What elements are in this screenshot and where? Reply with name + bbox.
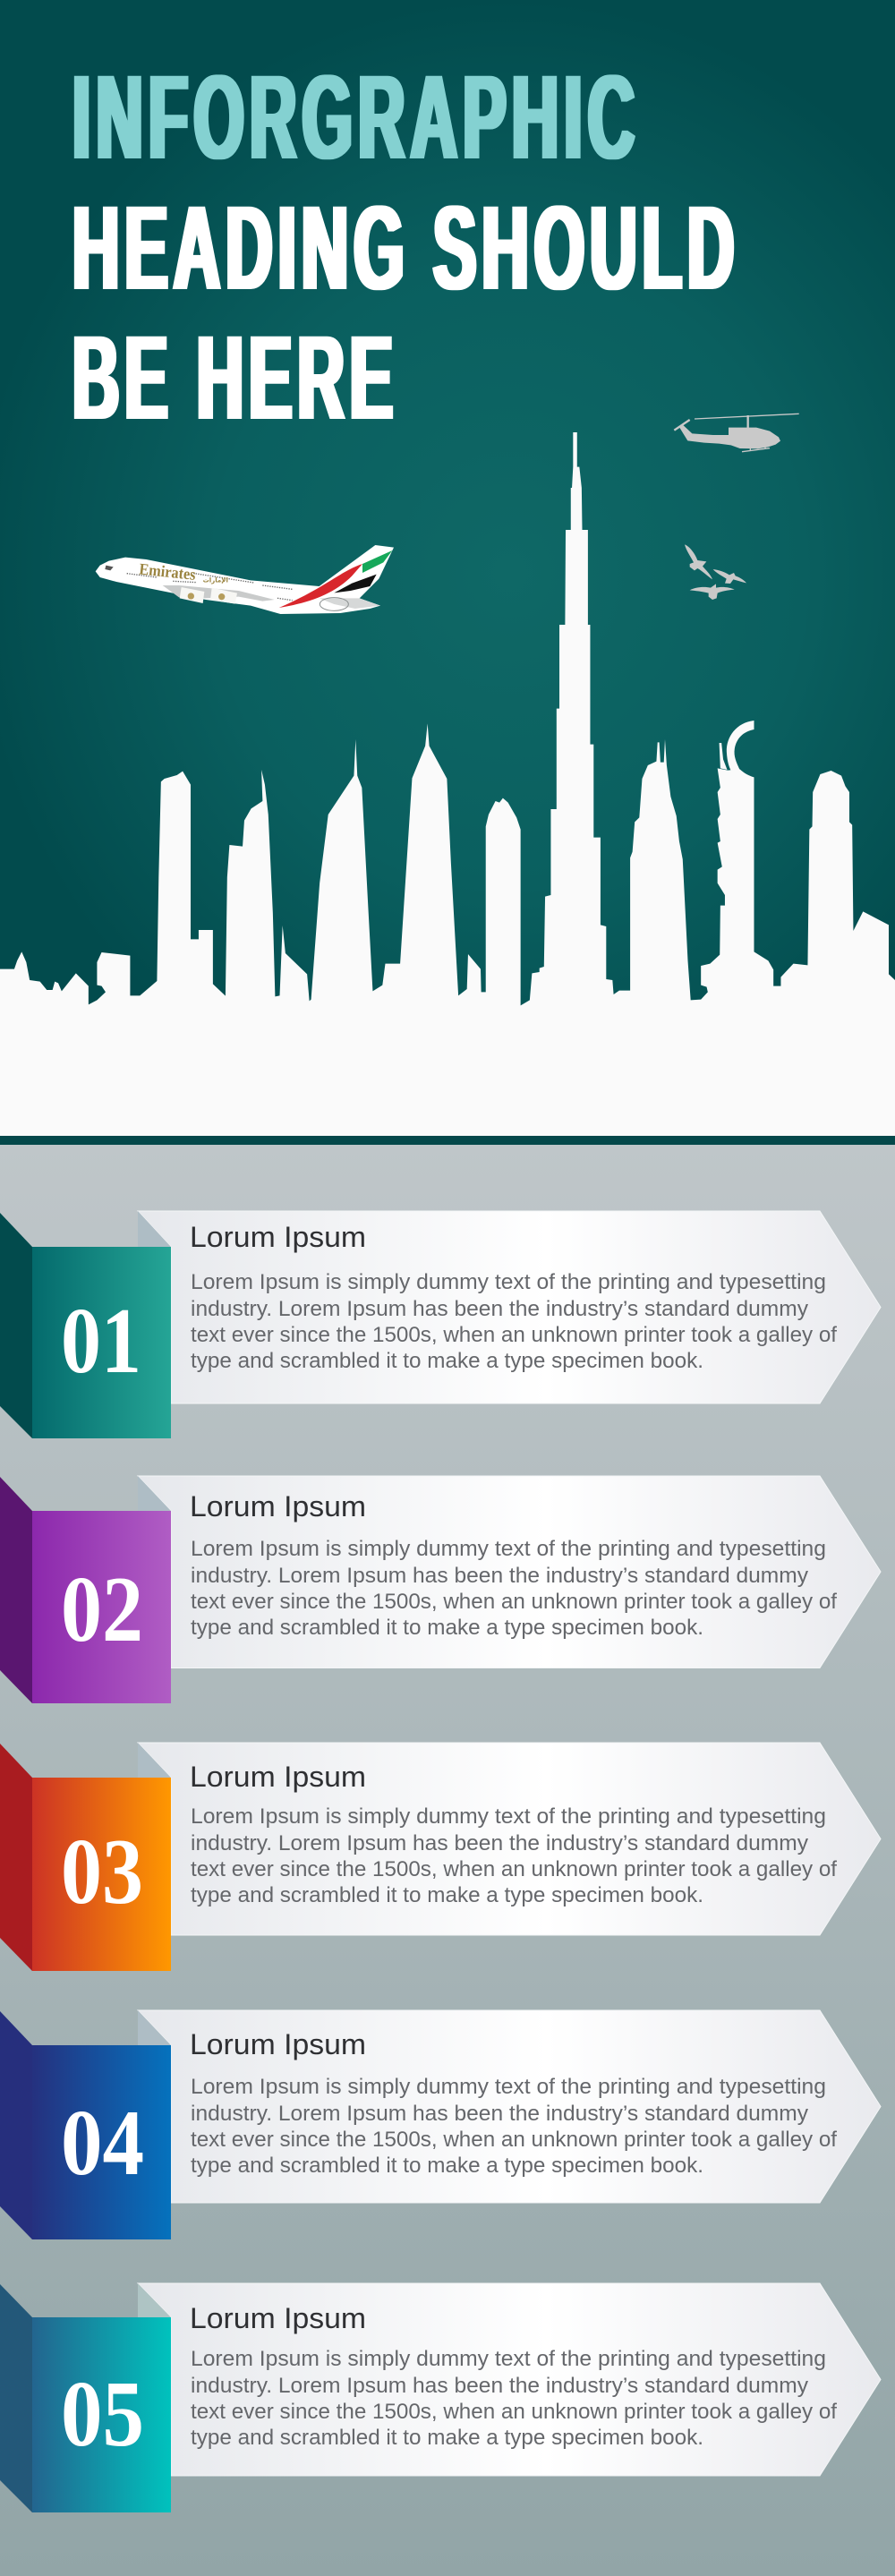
fold [138,1476,171,1511]
bottom band [0,1136,895,1145]
fold [138,1211,171,1247]
airline name arabic: الإمارات [203,576,228,584]
skyline silhouette [0,432,895,1137]
body text [191,2347,837,2450]
number block [32,2045,171,2239]
arrow card [138,2010,881,2203]
body text: text ever since the 1500s, when an unknown printer took a galley of [191,1590,837,1614]
number: 02 [61,1557,143,1661]
arrow card [138,1743,881,1935]
body text: Lorem Ipsum is simply dummy text of the printing and typesetting [191,1270,826,1294]
body text [191,1537,837,1640]
heading: Lorum Ipsum [190,1221,366,1253]
panel: item 05 [0,2283,881,2512]
number: 03 [61,1819,143,1923]
heading: Lorum Ipsum [190,1761,366,1793]
body text: industry. Lorem Ipsum has been the industry’s standard dummy [191,1564,808,1588]
panel: item 03 [0,1743,881,1971]
body text: text ever since the 1500s, when an unknown printer took a galley of [191,1323,837,1347]
side face [0,2011,32,2239]
body text: industry. Lorem Ipsum has been the industry’s standard dummy [191,2102,808,2126]
panel: item 02 [0,1476,881,1703]
body text: Lorem Ipsum is simply dummy text of the printing and typesetting [191,2347,826,2371]
body text: Lorem Ipsum is simply dummy text of the printing and typesetting [191,1804,826,1829]
body text: type and scrambled it to make a type specimen book. [191,1349,703,1373]
number block [32,1778,171,1971]
body text: text ever since the 1500s, when an unknown printer took a galley of [191,2128,837,2152]
body text [191,2075,837,2178]
body text: type and scrambled it to make a type specimen book. [191,1883,703,1907]
body text: text ever since the 1500s, when an unknown printer took a galley of [191,2400,837,2424]
title: INFORGRAPHIC [72,50,635,184]
panel: item 01 [0,1211,881,1438]
airline name: Emirates [139,559,197,584]
heading: Lorum Ipsum [190,2028,366,2060]
side face [0,1744,32,1971]
title [72,50,734,445]
body text: industry. Lorem Ipsum has been the industry’s standard dummy [191,1297,808,1321]
body text: industry. Lorem Ipsum has been the industry’s standard dummy [191,1831,808,1855]
fold [138,2010,171,2045]
body text: type and scrambled it to make a type specimen book. [191,1616,703,1640]
icon: airplane [96,545,394,614]
side face [0,1213,32,1438]
body text: type and scrambled it to make a type specimen book. [191,2154,703,2178]
side face [0,2284,32,2512]
title: HEADING SHOULD [72,181,734,315]
lower panel background [0,1145,895,2576]
panel: item 04 [0,2010,881,2239]
icon: helicopter [674,414,799,452]
header panel [0,0,895,1145]
body text: type and scrambled it to make a type specimen book. [191,2426,703,2450]
fold [138,1743,171,1778]
number: 04 [61,2090,144,2195]
title: BE HERE [72,311,393,445]
number block [32,1511,171,1703]
arrow card [138,1211,881,1403]
body text: Lorem Ipsum is simply dummy text of the printing and typesetting [191,1537,826,1561]
side face [0,1477,32,1703]
icon: birds [685,544,746,600]
body text [191,1270,837,1373]
heading: Lorum Ipsum [190,2302,366,2334]
body text: Lorem Ipsum is simply dummy text of the printing and typesetting [191,2075,826,2099]
number: 05 [61,2361,144,2466]
body text: industry. Lorem Ipsum has been the industry’s standard dummy [191,2374,808,2398]
arrow card [138,1476,881,1668]
number block [32,2317,171,2512]
number: 01 [61,1288,141,1393]
body text [191,1804,837,1907]
heading: Lorum Ipsum [190,1490,366,1523]
body text: text ever since the 1500s, when an unknown printer took a galley of [191,1857,837,1881]
fold [138,2283,171,2317]
number block [32,1247,171,1438]
arrow card [138,2283,881,2476]
